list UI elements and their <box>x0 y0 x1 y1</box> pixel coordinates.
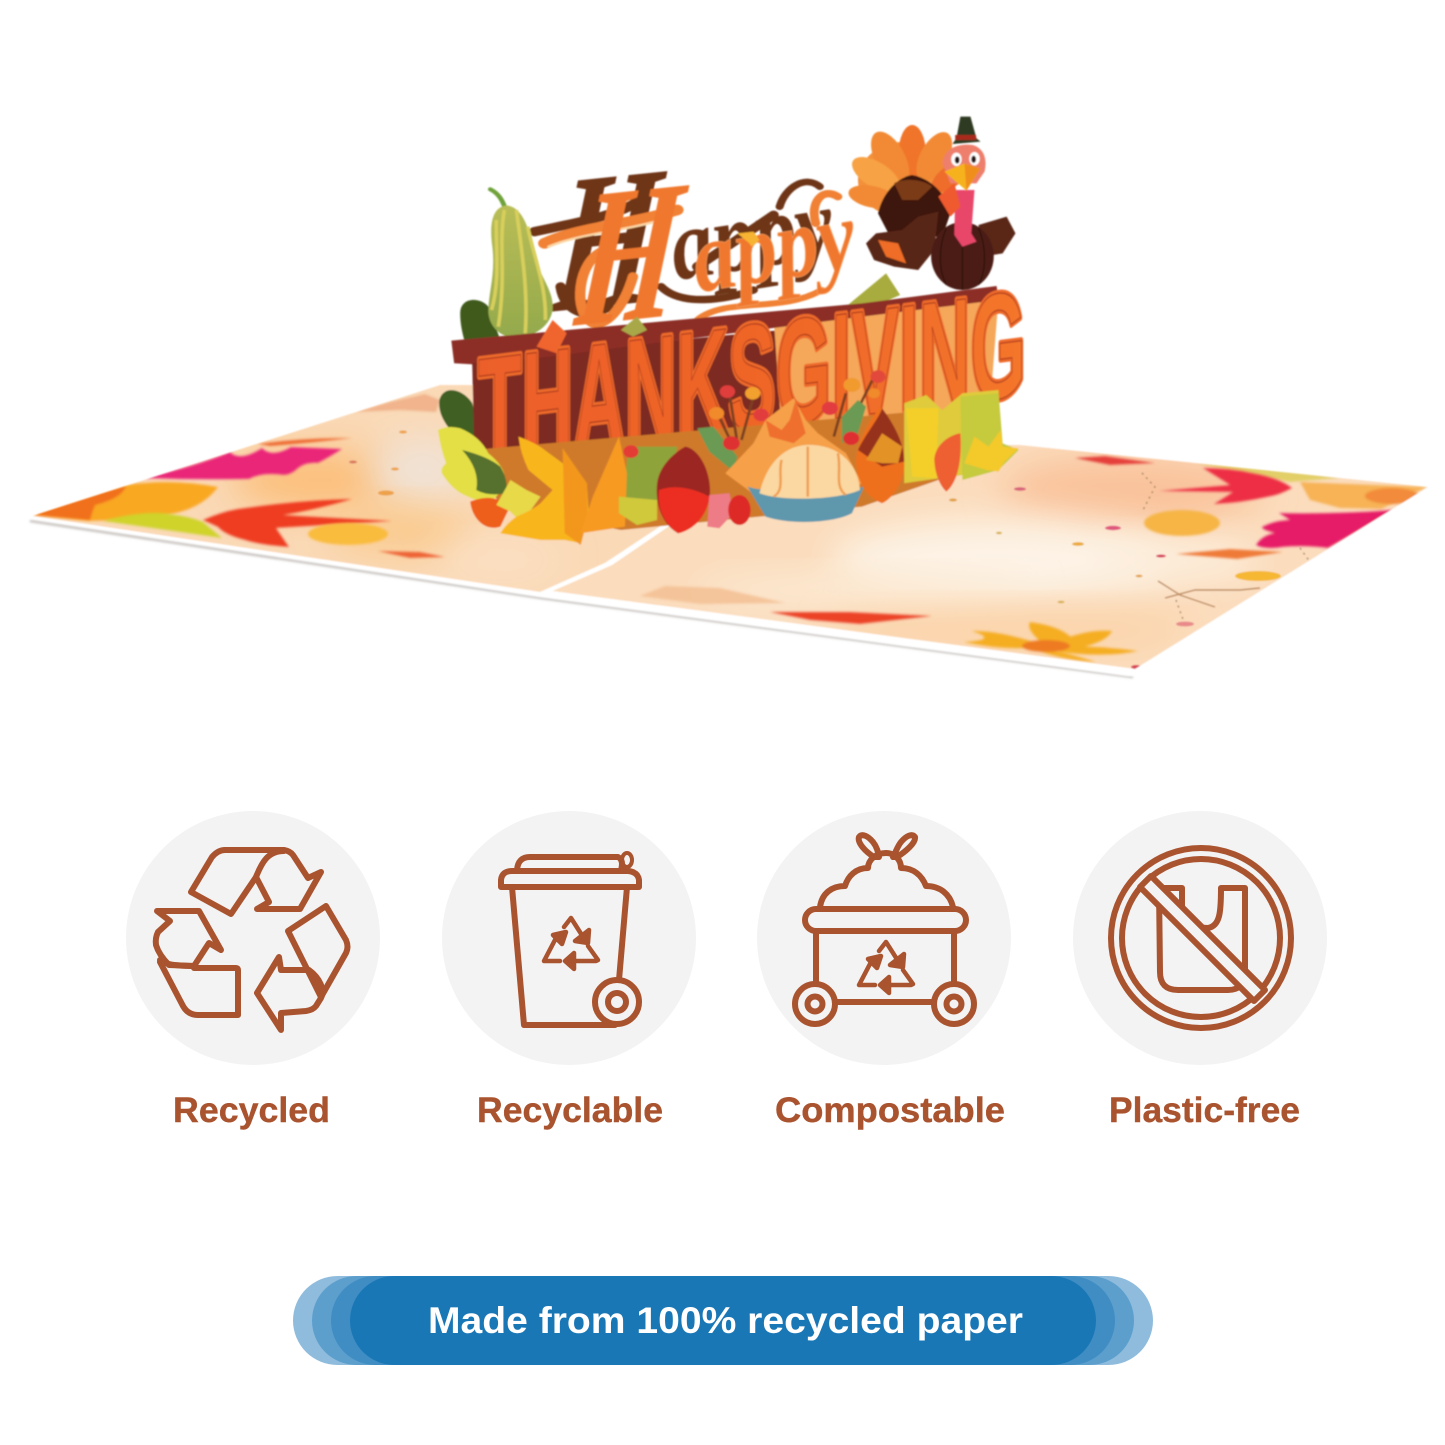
yellow maple leaf <box>500 437 589 543</box>
callout: recycled paper pill <box>293 1276 1153 1365</box>
right pumpkin <box>856 407 904 503</box>
background foliage between letters <box>537 232 760 353</box>
label: Plastic-free: Plastic-free <box>1109 1091 1300 1130</box>
panel: eco badges <box>126 811 1327 1130</box>
heading: THANKSGIVING <box>478 259 1026 495</box>
pie tin <box>747 487 864 522</box>
leaf: small yellow <box>308 523 388 545</box>
turkey neck and wattle <box>954 190 976 247</box>
maroon band <box>451 286 999 455</box>
icon: no plastic bag <box>1111 848 1291 1028</box>
red pod <box>657 447 710 533</box>
icon: compost cart <box>795 835 974 1024</box>
label: Compostable: Compostable <box>775 1091 1005 1130</box>
badge: recyclable <box>442 811 696 1130</box>
leaf: lower red <box>770 612 932 624</box>
no-entry diagonal bar <box>1140 876 1265 1001</box>
icon: mini recycle <box>544 918 598 969</box>
badge: recycled <box>126 811 380 1130</box>
turkey beak <box>944 163 981 191</box>
leaf: top red <box>1075 456 1155 465</box>
card right panel <box>552 440 1428 669</box>
right panel dots <box>949 487 1194 669</box>
leaf: yellow-green strip <box>1195 463 1340 482</box>
sunflower <box>964 622 1138 662</box>
turkey dark feathers <box>878 175 950 237</box>
pop-up card photo <box>29 117 1432 677</box>
turkey <box>845 117 1015 290</box>
label: Recycled: Recycled <box>173 1091 330 1130</box>
icon: wheelie bin <box>501 853 639 1025</box>
leaf: pink right <box>1256 510 1393 548</box>
appy letters: appy <box>684 179 864 313</box>
brown appy: appy <box>662 167 842 301</box>
card left panel <box>32 385 700 592</box>
front foliage left <box>438 427 657 545</box>
pink pod <box>707 493 733 528</box>
front foliage center <box>623 370 904 533</box>
badge: plastic-free <box>1073 811 1327 1130</box>
H letter: H <box>561 139 701 370</box>
leaf: small yellow right <box>1235 571 1281 581</box>
leaf: orange top strip <box>258 438 352 446</box>
base filler under foliage <box>472 390 999 530</box>
turkey body <box>931 222 994 290</box>
leaf: red maple <box>203 499 392 547</box>
yellow-green leaves <box>438 427 504 500</box>
orange swashes <box>545 194 838 324</box>
leaf: yellow-green <box>103 513 222 538</box>
berry stems <box>717 377 874 447</box>
brown H: H <box>539 125 679 356</box>
shadow swashes <box>535 182 820 313</box>
dotted trail <box>1142 473 1310 625</box>
orange leaf <box>581 437 627 533</box>
card shadow and white edge <box>29 385 1432 677</box>
leaf: round yellow <box>1144 510 1220 536</box>
turkey hat <box>952 117 981 144</box>
roast turkey <box>725 398 862 500</box>
small star leaf <box>496 480 541 522</box>
leaf: orange low strip <box>378 551 445 558</box>
line art leaves <box>640 586 785 604</box>
front foliage right <box>906 393 1019 492</box>
turkey wing right <box>979 217 1015 257</box>
callout text: Made from 100% recycled paper <box>428 1300 1023 1341</box>
pie crust <box>760 445 860 499</box>
leaf: big red <box>1159 468 1292 504</box>
red apple <box>934 433 961 492</box>
green sprig <box>697 427 737 472</box>
center fold line <box>542 567 604 594</box>
heading: Happy <box>545 139 864 370</box>
leaf: orange-yellow corner <box>1300 482 1427 509</box>
turkey head <box>942 145 986 183</box>
icon: mini recycle <box>859 942 913 993</box>
leaf: pink <box>141 447 342 479</box>
yellow leaf cluster <box>906 408 938 478</box>
berries <box>623 370 886 458</box>
left panel dots <box>349 430 407 496</box>
turkey wing left <box>866 212 938 270</box>
line art leaves <box>356 394 440 412</box>
icon: recycle arrows <box>156 850 348 1030</box>
brown script shadow <box>535 125 842 356</box>
leaf: orange tip <box>34 486 126 520</box>
badge: compostable <box>757 811 1011 1130</box>
turkey tail fan <box>845 125 976 218</box>
leaf: orange middle <box>1176 549 1283 559</box>
gourd <box>488 189 553 338</box>
label: Recyclable: Recyclable <box>477 1091 663 1130</box>
pop-up back layer: greens and maroon wall <box>439 273 999 457</box>
leaf: orange and yellow <box>34 482 218 521</box>
star leaf <box>964 430 1019 472</box>
